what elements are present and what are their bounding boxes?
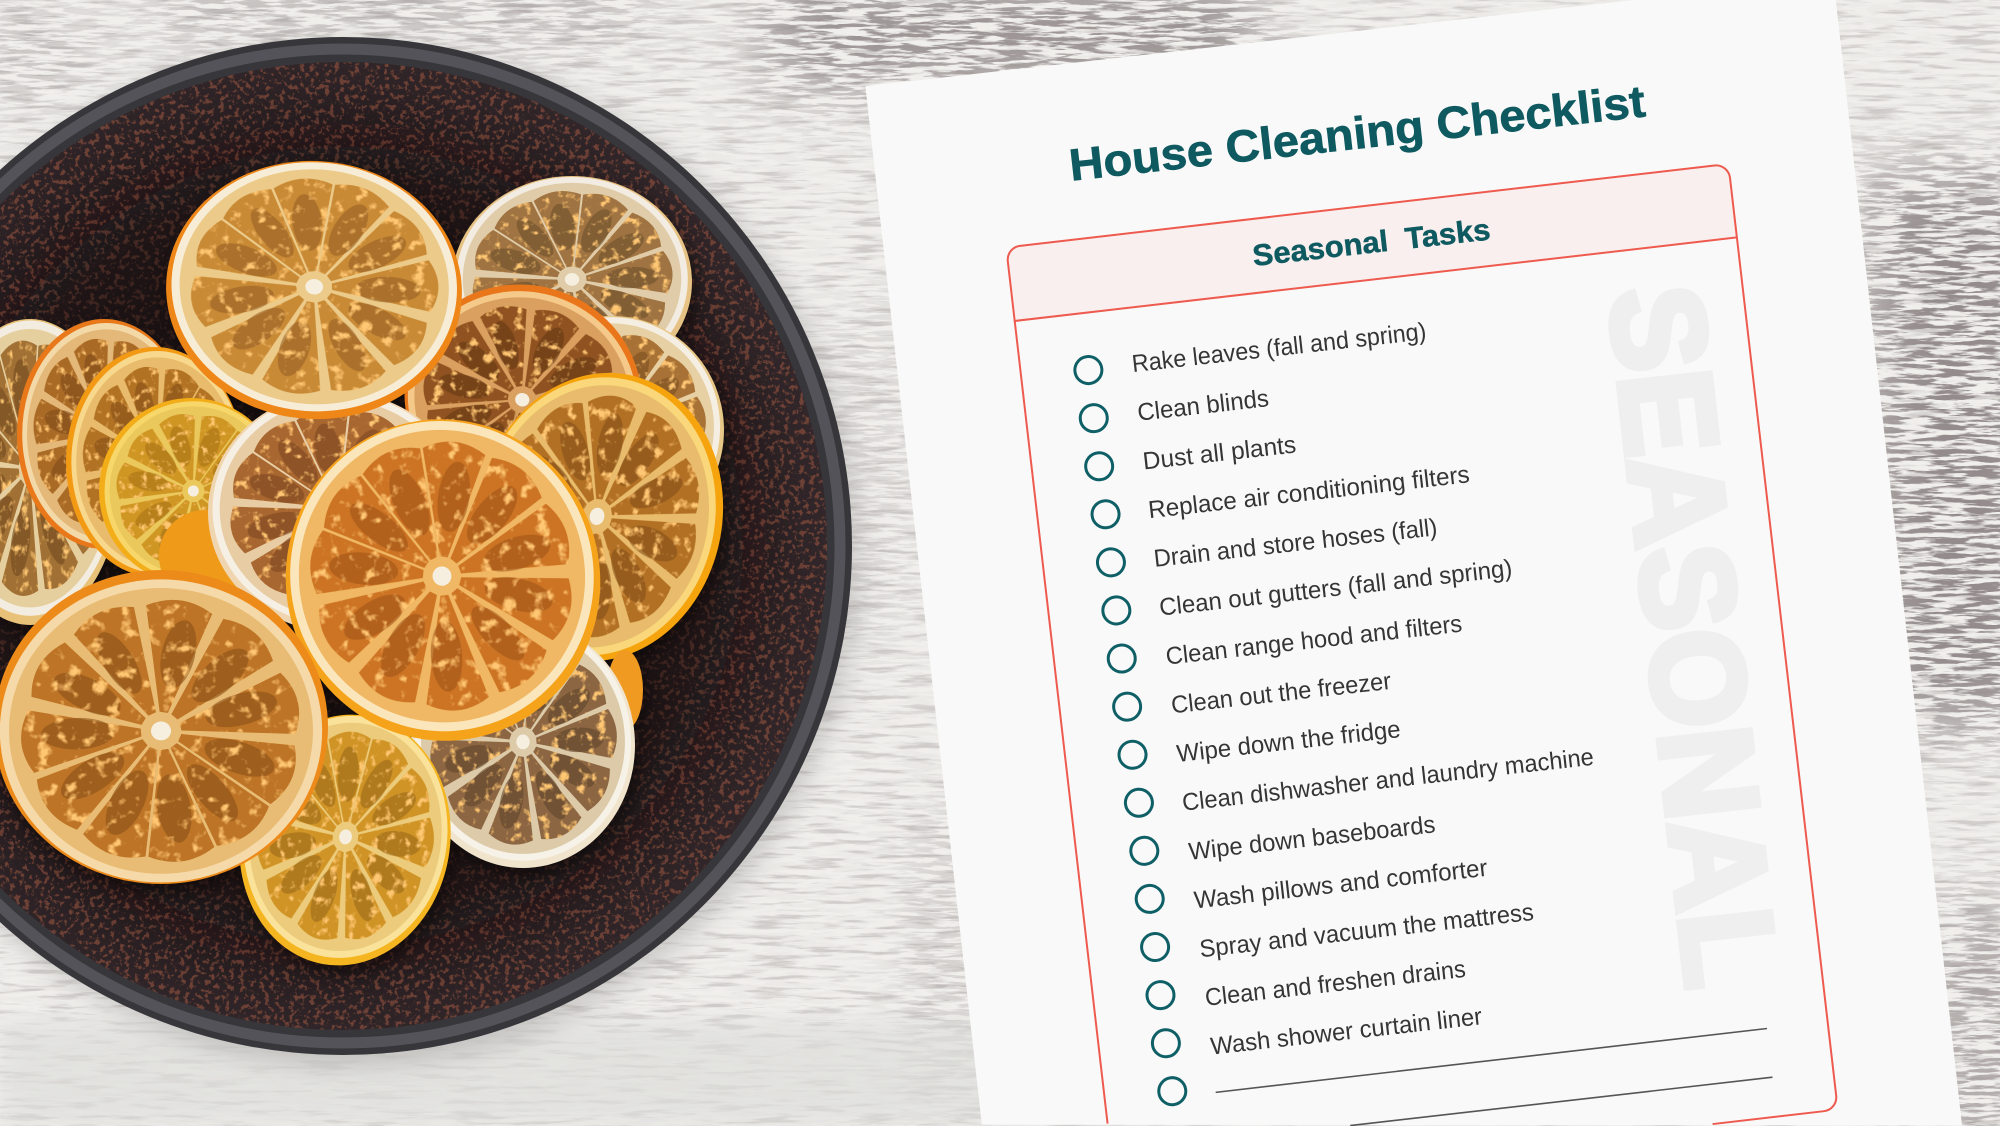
orange tip behind pale slice — [607, 650, 643, 730]
slice: pale middle — [208, 392, 468, 632]
checklist item: freezer — [1112, 664, 1392, 726]
slice: right far pale — [500, 316, 724, 544]
checklist item: drains: Clean and freshen drains — [1204, 956, 1467, 1012]
slice: big orange right — [451, 350, 749, 684]
bowl rim — [0, 37, 852, 1055]
slice: dark orange behind top — [379, 258, 667, 536]
slice: bottom yellow — [220, 698, 470, 982]
checklist item: dust plants: Dust all plants — [1141, 431, 1298, 475]
slice: left orange — [17, 319, 191, 549]
checklist item: hoses: Drain and store hoses (fall) — [1152, 514, 1439, 573]
checklist item: freezer: Clean out the freezer — [1170, 668, 1392, 719]
slice: left bright orange — [66, 347, 244, 577]
orange slices pile — [0, 151, 749, 982]
bowl with dried orange slices — [0, 37, 861, 1067]
panel heading: Seasonal Tasks — [1251, 213, 1492, 273]
bowl shadow on table — [0, 41, 861, 1067]
checklist item: rake leaves: Rake leaves (fall and spring) — [1131, 318, 1428, 378]
paper: checklist sheet — [865, 0, 1962, 1126]
slice: bottom right pale — [411, 622, 635, 868]
checklist item: range hood: Clean range hood and filters — [1164, 611, 1464, 671]
paper sheet — [865, 0, 1962, 1126]
slice: left yellow — [99, 398, 283, 584]
slice: centre large — [250, 384, 636, 776]
checklist item: shower curtain: Wash shower curtain liner — [1209, 1003, 1483, 1061]
checklist item: shower curtain — [1151, 994, 1483, 1067]
panel: seasonal tasks — [1006, 164, 1838, 1126]
blank line 2 — [1350, 1077, 1773, 1126]
checklist item: dishwasher: Clean dishwasher and laundry machine — [1181, 744, 1595, 817]
slice: far left pale — [0, 319, 122, 625]
panel header band — [1006, 164, 1737, 321]
checklist item: fridge — [1118, 711, 1402, 774]
slice: small orange piece — [159, 510, 251, 602]
checklist item: dust plants — [1084, 431, 1298, 482]
checklist item: gutters: Clean out gutters (fall and spring) — [1158, 555, 1514, 622]
checklist item: pillows: Wash pillows and comforter — [1193, 855, 1489, 914]
checklist item: blank line — [1157, 1011, 1768, 1106]
bowl basin — [0, 49, 840, 1043]
checklist item: clean blinds: Clean blinds — [1136, 385, 1270, 427]
checklist item: baseboards: Wipe down baseboards — [1187, 811, 1437, 866]
slice: lower left large — [0, 570, 328, 884]
checklist item: clean blinds — [1079, 385, 1270, 433]
title: House Cleaning Checklist — [1067, 76, 1648, 191]
checklist item: pillows — [1135, 848, 1489, 921]
checklist item: fridge: Wipe down the fridge — [1175, 716, 1402, 768]
checklist item: mattress — [1140, 891, 1535, 970]
checklist item: drains — [1146, 948, 1467, 1018]
slice: top right pale — [452, 176, 692, 388]
panel outline — [1015, 237, 1838, 1126]
watermark: SEASONAL: SEASONAL — [1581, 278, 1806, 994]
slice: top large — [157, 151, 471, 429]
checklist item: baseboards — [1129, 805, 1437, 872]
checklist item: air conditioning filters: Replace air conditioning filters — [1147, 461, 1471, 524]
checklist item: mattress: Spray and vacuum the mattress — [1198, 899, 1535, 963]
